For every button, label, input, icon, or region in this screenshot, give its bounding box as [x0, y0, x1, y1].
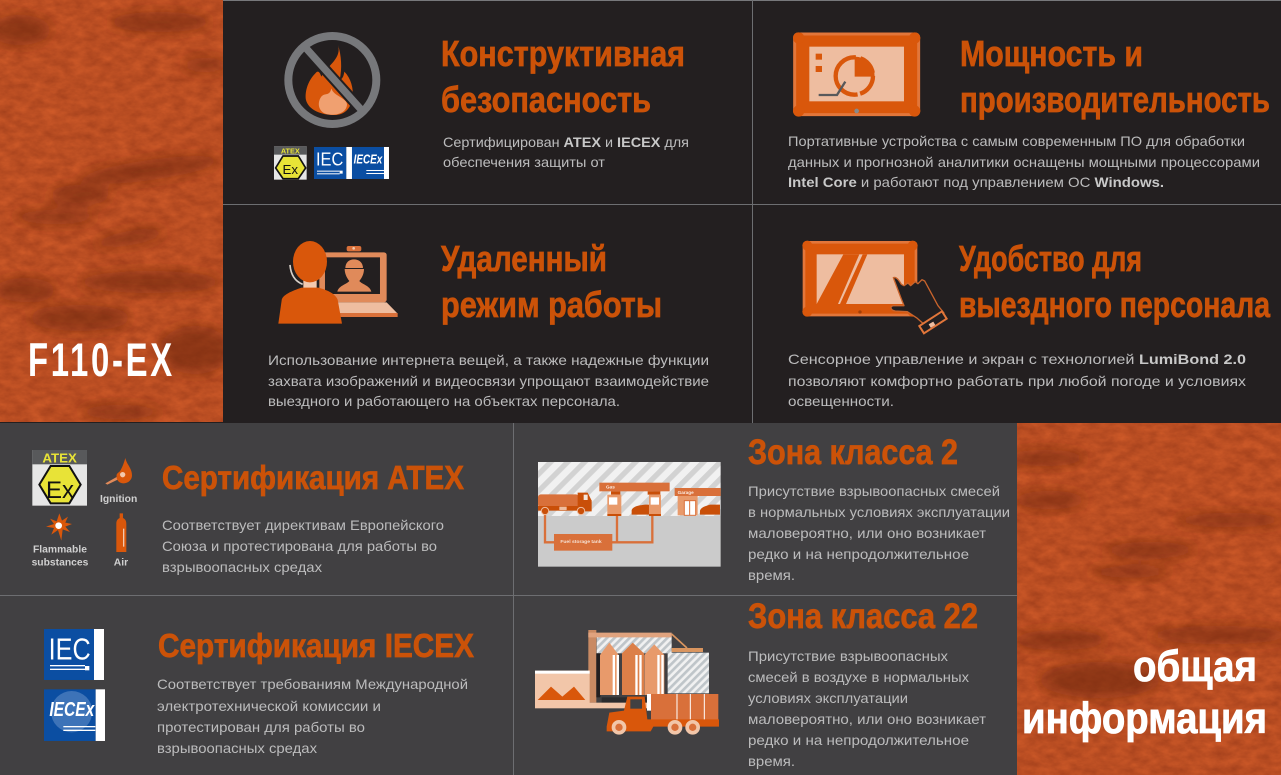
- label: Flammable substances: substances: [32, 558, 89, 569]
- icon: remote worker with laptop: [278, 241, 398, 324]
- label: Flammable substances: Flammable: [33, 545, 87, 556]
- heading: Мощность и производительность: Мощность и: [960, 33, 1143, 74]
- dark top panel background: [223, 0, 1281, 423]
- icon: no fire: [288, 36, 376, 124]
- panel: left sand texture: [0, 0, 230, 422]
- label: общая информация: [1022, 642, 1267, 743]
- heading: Конструктивная безопасность: Конструктивная: [441, 33, 685, 74]
- icon: flammable spark: [46, 513, 72, 541]
- text: IECEX description: взрывоопасных средах: [157, 740, 317, 756]
- text: ATEX description: [162, 517, 444, 575]
- label: Flammable substances: [32, 545, 89, 569]
- text: zone 2 description: редко и на непродолжительное: [748, 546, 969, 562]
- text: IECEX description: электротехнической комиссии и: [157, 698, 381, 714]
- text: remote description: [268, 352, 709, 409]
- label: gas canopy: Gas: [606, 485, 615, 490]
- icon: small certification logos: IECEx: [354, 151, 383, 166]
- heading: Удобство для выездного персонала: Удобство для: [959, 238, 1142, 279]
- text: safety description: [443, 134, 689, 170]
- text: zone 2 description: Присутствие взрывоопасных смесей: [748, 483, 1000, 499]
- text: IECEX description: Соответствует требованиям Международной: [157, 676, 468, 692]
- label: garage: Garage: [678, 490, 694, 495]
- label: общая информация: общая: [1133, 642, 1257, 691]
- text: field staff description: позволяют комфортно работать при любой погоде и условиях: [788, 373, 1246, 389]
- text: zone 2 description: в нормальных условиях эксплуатации: [748, 504, 1010, 520]
- icon: air cylinder: [116, 513, 126, 552]
- text: zone 2 description: маловероятно, или оно возникает: [748, 525, 987, 541]
- lower grey panel background: [0, 423, 1017, 775]
- text: power description: [788, 133, 1260, 190]
- heading: Зона класса 22: Зона класса 22: [748, 597, 978, 636]
- icon: tablet with chart: [793, 32, 920, 117]
- heading: Сертификация ATEX: Сертификация ATEX: [162, 459, 464, 496]
- text: zone 22 description: Присутствие взрывоопасных: [748, 648, 948, 664]
- icon: IEC and IECEx logos: IECEx: [49, 699, 95, 721]
- chart: gas station diagram: [538, 462, 721, 567]
- heading: Удаленный режим работы: [441, 238, 662, 325]
- text: ATEX description: взрывоопасных средах: [162, 559, 322, 575]
- icon: small certification logos: IEC: [316, 149, 343, 170]
- text: field staff description: Сенсорное управление и экран с технологией LumiBond 2.0: [788, 351, 1246, 367]
- text: field staff description: [788, 351, 1246, 409]
- text: zone 2 description: время.: [748, 567, 795, 583]
- text: zone 22 description: маловероятно, или оно возникает: [748, 711, 987, 727]
- text: IECEX description: протестирован для работы во: [157, 719, 365, 735]
- icon: fuel truck: [538, 493, 592, 515]
- icon: small certification logos: [274, 146, 389, 180]
- text: IECEX description: [157, 676, 468, 756]
- label: fuel storage tank: Fuel storage tank: [560, 539, 602, 545]
- label: Ignition: Ignition: [100, 494, 137, 505]
- heading: Удаленный режим работы: режим работы: [441, 284, 662, 325]
- heading: Зона класса 2: Зона класса 2: [748, 433, 958, 472]
- text: zone 22 description: смесей в воздухе в нормальных: [748, 669, 969, 685]
- text: zone 2 description: [748, 483, 1010, 583]
- icon: ATEX logo: [32, 450, 87, 506]
- label: F110-EX: F110-EX: [28, 333, 172, 386]
- heading: Мощность и производительность: [960, 33, 1270, 120]
- text: zone 22 description: редко и на непродолжительное: [748, 732, 969, 748]
- icon: fuel pumps: [607, 495, 661, 516]
- label: garage: [675, 488, 721, 515]
- text: zone 22 description: время.: [748, 753, 795, 769]
- heading: Конструктивная безопасность: безопасность: [441, 79, 651, 120]
- text: ATEX description: Соответствует директивам Европейского: [162, 517, 444, 533]
- text: remote description: Использование интернета вещей, а также надежные функции: [268, 352, 709, 368]
- panel: right sand texture: [1005, 423, 1281, 775]
- icon: match ignition: [105, 458, 132, 485]
- text: safety description: обеспечения защиты от: [443, 154, 606, 170]
- icon: IEC and IECEx logos: [44, 629, 105, 741]
- text: power description: Intel Core и работают под управлением ОС Windows.: [788, 174, 1164, 190]
- icon: IEC and IECEx logos: IEC: [49, 632, 91, 666]
- text: zone 22 description: условиях эксплуатации: [748, 690, 908, 706]
- icon: ATEX logo: ATEX: [42, 451, 77, 466]
- text: power description: Портативные устройства с самым современным ПО для обработки: [788, 133, 1245, 149]
- text: remote description: выездного и работающего на объектах персонала.: [268, 393, 620, 409]
- text: zone 22 description: [748, 648, 987, 769]
- text: power description: данных и прогнозной аналитики оснащены мощными процессорами: [788, 154, 1260, 170]
- icon: ATEX logo: Ex: [46, 477, 74, 504]
- text: remote description: захвата изображений и видеосвязи упрощают взаимодействие: [268, 373, 709, 389]
- icon: spark core: [55, 522, 62, 529]
- icon: small certification logos: Ex: [283, 162, 298, 177]
- text: safety description: Сертифицирован ATEX и IECEX для: [443, 134, 689, 150]
- chart: silo and truck illustration: [535, 630, 719, 735]
- heading: Удаленный режим работы: Удаленный: [441, 238, 607, 279]
- icon: touch tablet with hand: [802, 241, 947, 333]
- label: fuel storage tank: [554, 534, 612, 551]
- icon: small certification logos: ATEX: [281, 146, 300, 155]
- heading: Удобство для выездного персонала: [959, 238, 1271, 325]
- label: Air: Air: [114, 558, 128, 569]
- icon: ATEX logo with triangle factors: [32, 450, 137, 569]
- label: gas canopy: [599, 483, 670, 495]
- text: field staff description: освещенности.: [788, 393, 894, 409]
- text: ATEX description: Союза и протестирована для работы во: [162, 538, 437, 554]
- heading: Конструктивная безопасность: [441, 33, 685, 120]
- heading: Сертификация IECEX: Сертификация IECEX: [158, 627, 474, 664]
